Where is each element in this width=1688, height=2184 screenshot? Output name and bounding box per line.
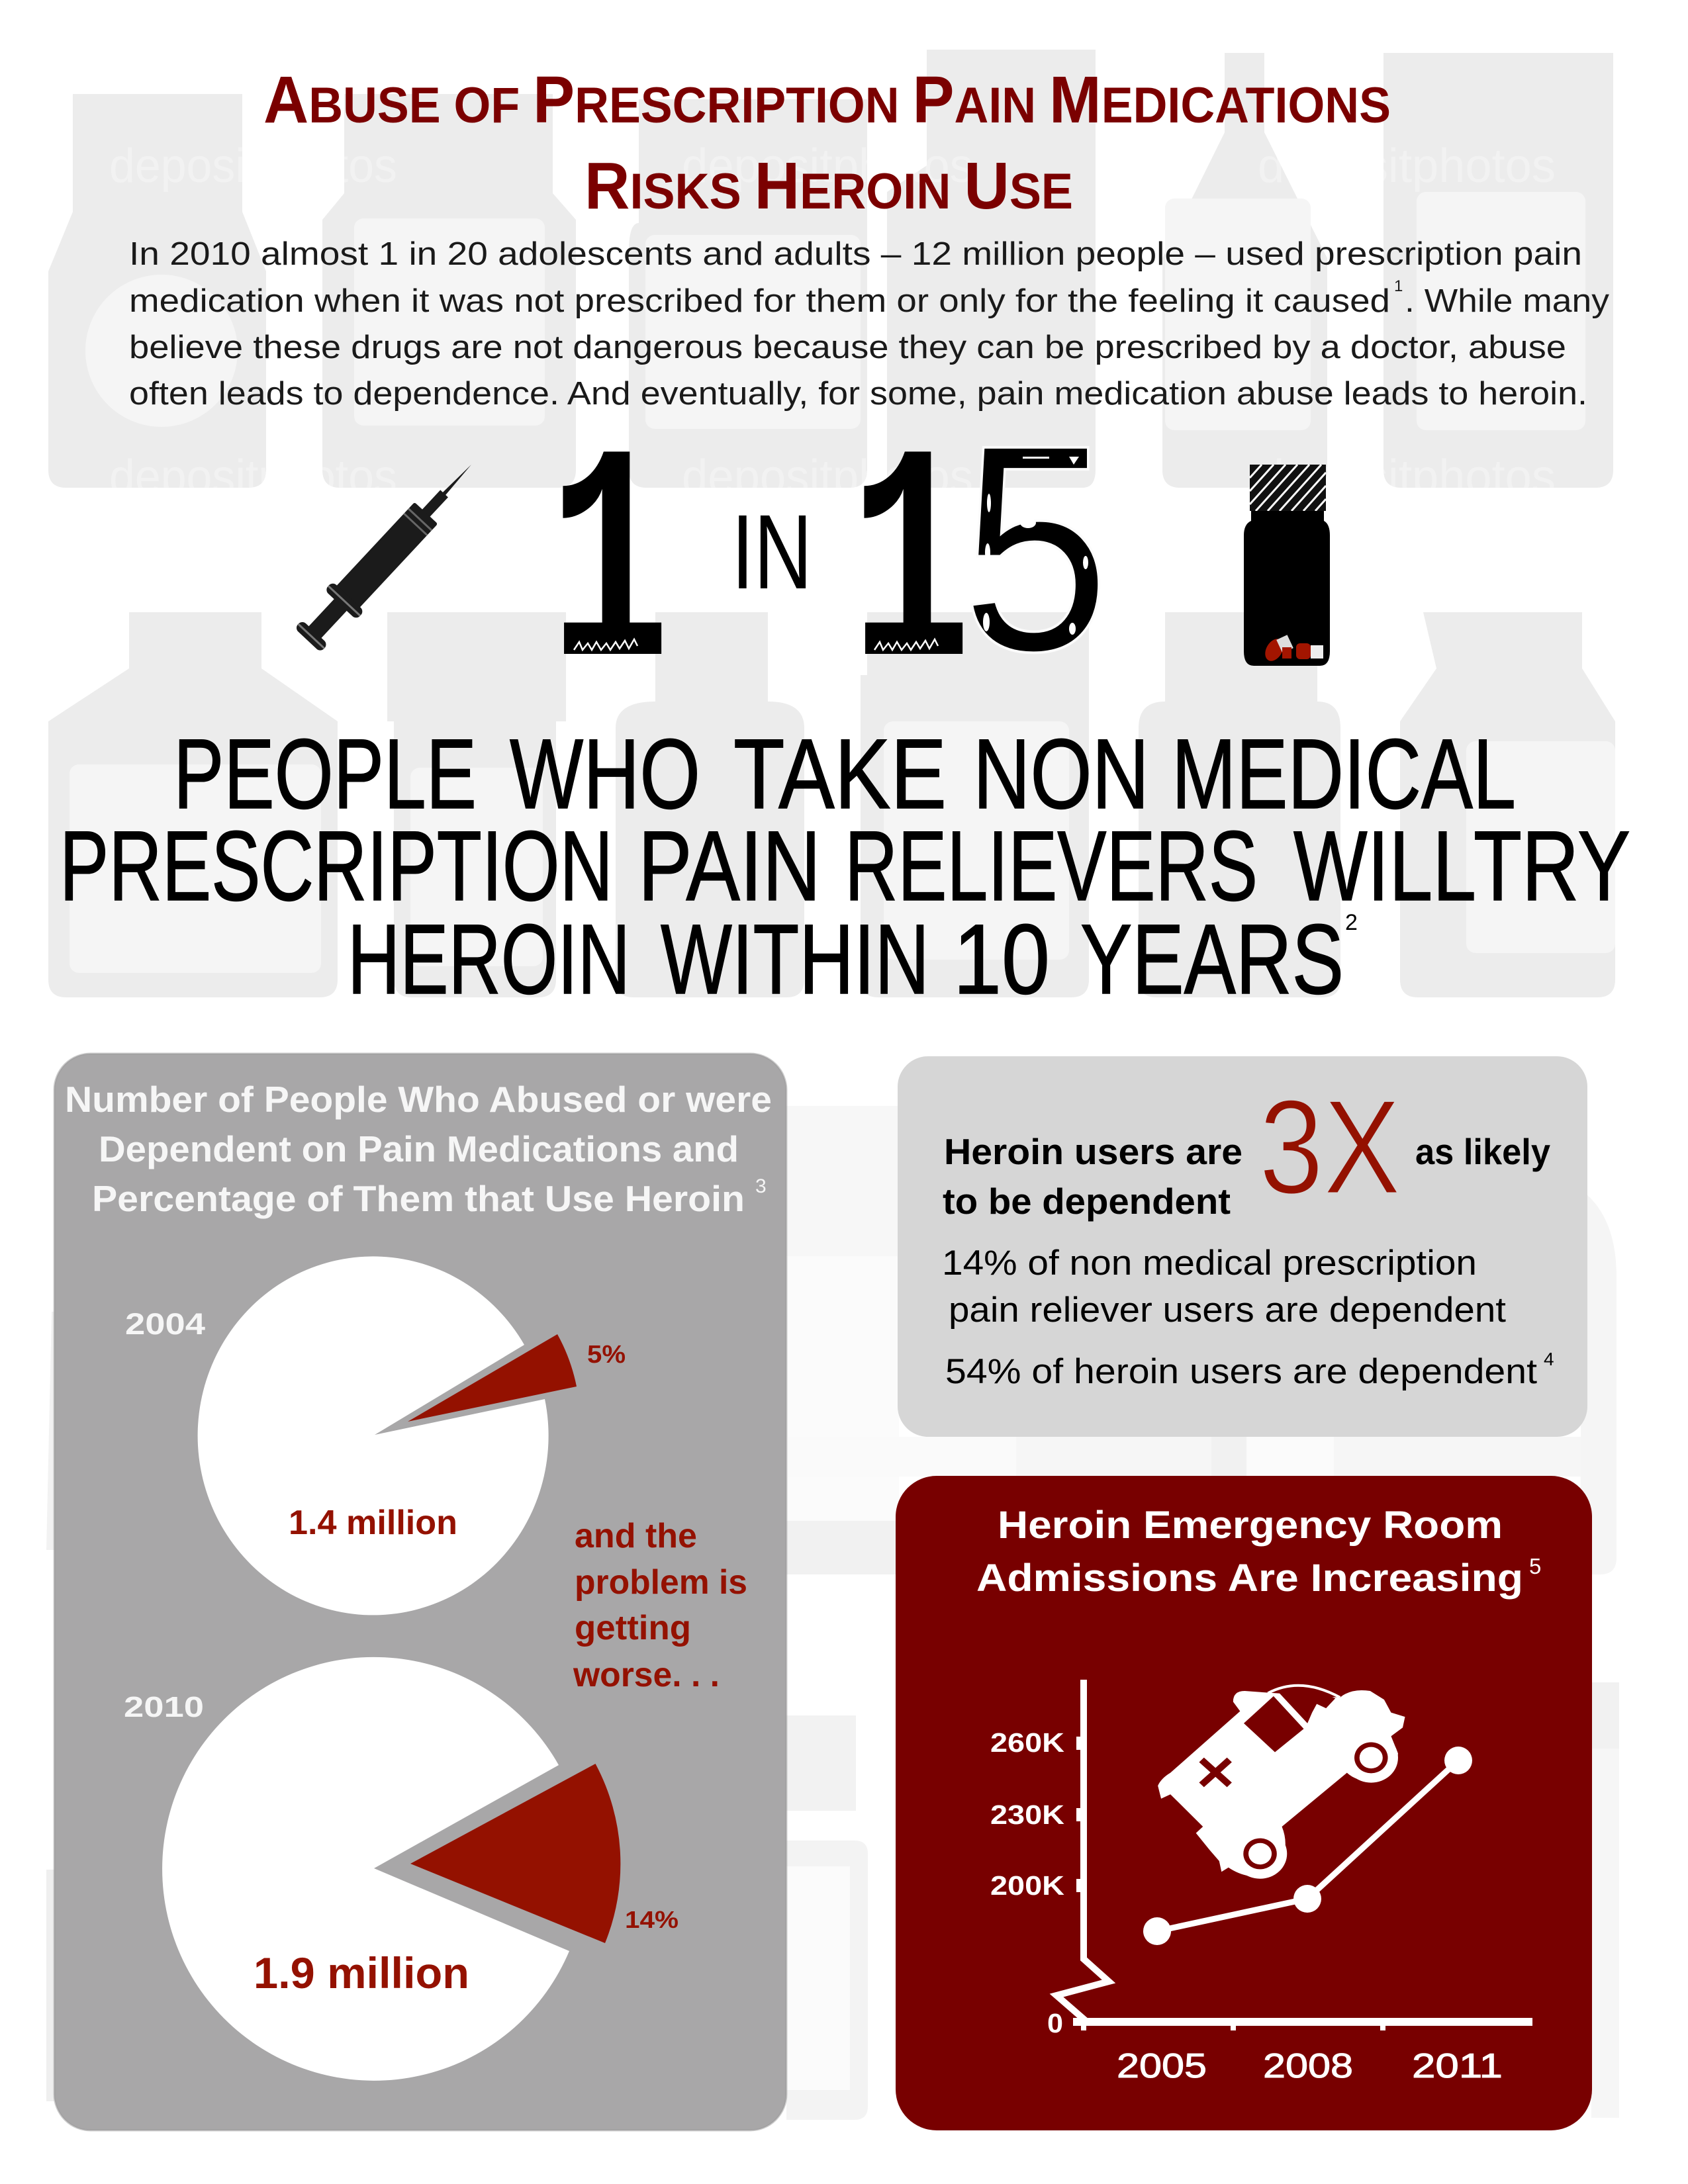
headline statement (60, 718, 1630, 1015)
dependence statistics: 4 (1544, 1349, 1554, 1369)
bottle body (1244, 511, 1330, 666)
pie chart: 2010 (124, 1657, 679, 2081)
line chart axes (990, 1680, 1532, 2085)
data line (1143, 1747, 1472, 1945)
lead statement: Heroin users are (944, 1131, 1243, 1172)
headline statement: HEROIN (348, 903, 630, 1015)
intro paragraph (129, 236, 1610, 412)
pie chart: 2004: 5% (587, 1341, 626, 1369)
panel: emergency room admissions (896, 1476, 1592, 2130)
title (263, 63, 1391, 223)
line chart axes: 2005 (1117, 2047, 1207, 2085)
intro paragraph: . While many (1405, 283, 1610, 319)
intro paragraph: 1 (1394, 277, 1403, 295)
headline statement: TAKE (733, 718, 947, 829)
statistic: 1 in 15 (549, 384, 1110, 747)
panel background (898, 1056, 1587, 1437)
statistic: 1 in 15: 1 (851, 399, 971, 747)
pie chart: 2004: 1.4 million (289, 1504, 457, 1542)
line chart axes: 230K (990, 1799, 1064, 1830)
dependence statistics: 54% of heroin users are dependent (945, 1352, 1537, 1391)
dependence statistics: pain reliever users are dependent (949, 1291, 1506, 1330)
intro paragraph: In 2010 almost 1 in 20 adolescents and adults – 12 million people – used prescription pain (129, 236, 1582, 272)
panel: pain medication pie charts (54, 1054, 786, 2130)
bottle cap (1250, 465, 1326, 511)
callout: and the problem is getting worse: and the (575, 1517, 697, 1555)
headline statement: WILL (1293, 810, 1476, 921)
panel heading: 3 (755, 1175, 767, 1197)
icon: ambulance (1158, 1686, 1405, 1879)
headline statement: MEDICAL (1172, 718, 1516, 829)
lead statement (943, 1131, 1550, 1222)
intro paragraph: often leads to dependence. And eventually, for some, pain medication abuse leads to heroin. (129, 376, 1587, 412)
panel heading (65, 1079, 772, 1219)
line chart axes: 2011 (1412, 2047, 1503, 2085)
panel: 3X as likely (898, 1056, 1587, 1437)
pie chart: 2004 (125, 1256, 626, 1615)
headline statement: YEARS (1080, 903, 1344, 1015)
panel heading (976, 1504, 1541, 1600)
line chart axes: 260K (990, 1727, 1064, 1758)
callout: and the problem is getting worse: problem is (575, 1563, 747, 1602)
pie chart: 2004: 2004 (125, 1307, 205, 1341)
line chart axes: 2008 (1263, 2047, 1353, 2085)
intro paragraph: believe these drugs are not dangerous because they can be prescribed by a doctor, abuse (129, 330, 1566, 365)
pie chart: 2010: 1.9 million (254, 1948, 469, 1997)
headline statement: 2 (1345, 910, 1358, 935)
pills (1262, 635, 1323, 664)
headline statement: PAIN (638, 810, 821, 921)
intro paragraph: medication when it was not prescribed for them or only for the feeling it caused (129, 283, 1390, 319)
headline statement: RELIEVERS (845, 810, 1258, 921)
callout: and the problem is getting worse (573, 1517, 747, 1694)
background: faint medicine bottles: depositphotos (1258, 140, 1556, 193)
lead statement: to be dependent (943, 1181, 1231, 1222)
big 3X: 3X (1259, 1072, 1401, 1222)
background: faint medicine bottles: depositphotos (1258, 451, 1556, 504)
headline statement: PEOPLE (173, 718, 477, 829)
dependence statistics: 14% of non medical prescription (942, 1244, 1477, 1283)
panel heading: Admissions Are Increasing (976, 1557, 1523, 1600)
headline statement: NON (973, 718, 1149, 829)
panel heading: 5 (1529, 1554, 1541, 1578)
headline statement: 10 (953, 903, 1050, 1015)
pie chart: 2010: 14% (625, 1906, 679, 1933)
panel heading: Dependent on Pain Medications and (99, 1128, 739, 1169)
headline statement: PRESCRIPTION (60, 810, 613, 921)
panel background (896, 1476, 1592, 2130)
title: ABUSE OF PRESCRIPTION PAIN MEDICATIONS (263, 63, 1391, 137)
line chart axes: 200K (990, 1870, 1064, 1901)
background: faint medicine bottles: depositphotos (109, 140, 397, 193)
background: faint medicine bottles: depositphotos (109, 451, 397, 504)
statistic: 1 in 15: 5 (961, 384, 1110, 713)
panel heading: Number of People Who Abused or were (65, 1079, 772, 1120)
headline statement: TRY (1474, 810, 1630, 921)
lead statement: as likely (1415, 1131, 1550, 1172)
line chart axes: 0 (1047, 2008, 1063, 2038)
panel heading: Heroin Emergency Room (998, 1504, 1503, 1547)
icon: pill bottle (1244, 465, 1330, 666)
panel heading: Percentage of Them that Use Heroin (92, 1178, 745, 1219)
callout: and the problem is getting worse: getting (575, 1609, 691, 1647)
statistic: 1 in 15: IN (731, 492, 812, 611)
title: RISKS HEROIN USE (585, 149, 1073, 223)
headline statement: WITHIN (661, 903, 929, 1015)
headline statement: WHO (510, 718, 700, 829)
icon: syringe (291, 449, 487, 655)
panel background (54, 1054, 786, 2130)
statistic: 1 in 15: 1 (549, 399, 670, 747)
callout: and the problem is getting worse: worse. . . (573, 1656, 720, 1694)
dependence statistics (942, 1244, 1554, 1391)
background: faint medicine bottles: depositphotos (682, 451, 973, 504)
background: faint medicine bottles: depositphotos (682, 140, 973, 193)
pie chart: 2010: 2010 (124, 1691, 204, 1723)
